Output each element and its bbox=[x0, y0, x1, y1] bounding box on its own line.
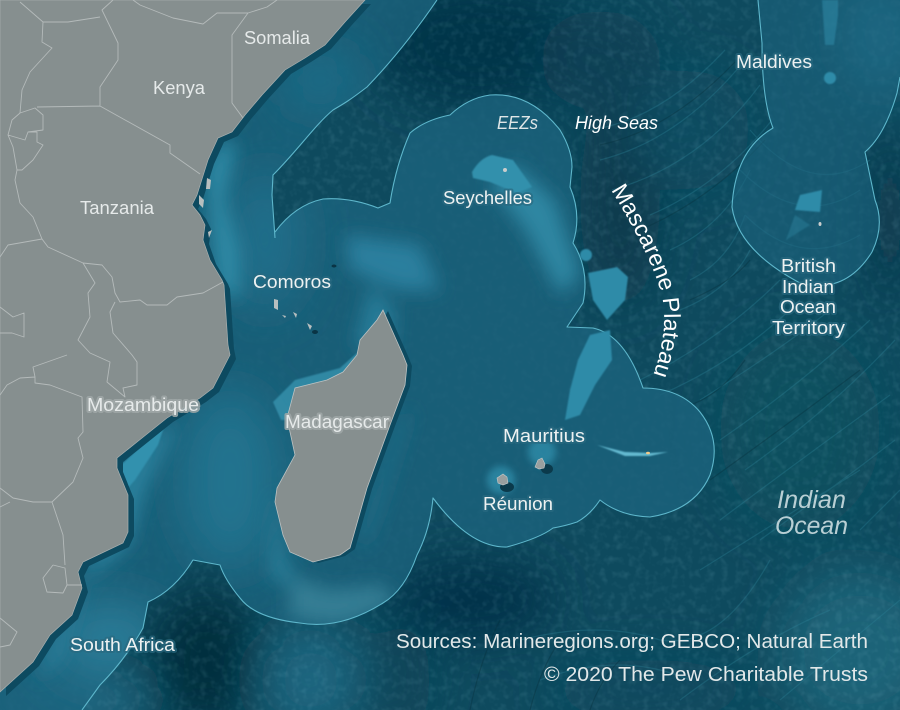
label: British Indian Ocean Territory: Indian bbox=[782, 277, 834, 297]
Chagos bank and Maldives atolls bbox=[786, 0, 838, 240]
label: Madagascar: Madagascar bbox=[285, 412, 389, 432]
label: Indian Ocean: Ocean bbox=[775, 512, 848, 540]
seafloor fracture ridges bbox=[520, 50, 900, 700]
land: Africa bbox=[0, 0, 365, 692]
Seychelles bank bbox=[472, 155, 532, 193]
Mascarene Plateau shallow banks bbox=[565, 249, 628, 420]
EEZ fill Maldives and British Indian Ocean Territory bbox=[732, 0, 900, 286]
label: High Seas: High Seas bbox=[575, 113, 658, 133]
label: Comoros: Comoros bbox=[253, 272, 331, 292]
label: Reunion: Réunion bbox=[483, 494, 553, 514]
copyright note: © 2020 The Pew Charitable Trusts bbox=[544, 664, 868, 686]
country borders bbox=[0, 0, 277, 647]
label: Indian Ocean bbox=[775, 486, 848, 540]
label: South Africa: South Africa bbox=[70, 635, 176, 655]
label: British Indian Ocean Territory: Territory bbox=[772, 318, 845, 338]
label: Tanzania: Tanzania bbox=[80, 198, 155, 218]
label: Somalia: Somalia bbox=[244, 28, 311, 48]
label: Kenya: Kenya bbox=[153, 78, 206, 98]
Madagascar north-west shelf bbox=[273, 352, 358, 420]
Africa coastal shadow bbox=[6, 4, 371, 696]
EEZ fill west, Seychelles, Mauritius and Reunion bbox=[0, 0, 714, 710]
label: Mauritius: Mauritius bbox=[503, 426, 585, 446]
label: Seychelles: Seychelles bbox=[443, 188, 532, 208]
source note: Sources: Marineregions.org; GEBCO; Natural Earth bbox=[396, 631, 868, 653]
Mozambique coastal shelf bbox=[120, 424, 165, 488]
label: Mozambique: Mozambique bbox=[87, 395, 199, 415]
label: British Indian Ocean Territory: Ocean bbox=[780, 297, 836, 317]
label: Mascarene Plateau: Mascarene Plateau bbox=[612, 183, 681, 377]
Mauritius ridge and glow bbox=[487, 438, 668, 494]
label: EEZs: EEZs bbox=[497, 113, 538, 133]
land: Madagascar bbox=[275, 310, 407, 562]
seafloor dark trenches bbox=[470, 62, 860, 710]
shallow zones inside EEZs bbox=[35, 50, 580, 680]
label: British Indian Ocean Territory: British bbox=[781, 256, 836, 276]
label: Maldives: Maldives bbox=[736, 52, 812, 72]
label: British Indian Ocean Territory bbox=[772, 256, 845, 338]
islands bbox=[199, 168, 822, 492]
Madagascar coastal shadow bbox=[280, 311, 412, 563]
label: Indian Ocean: Indian bbox=[777, 486, 846, 514]
